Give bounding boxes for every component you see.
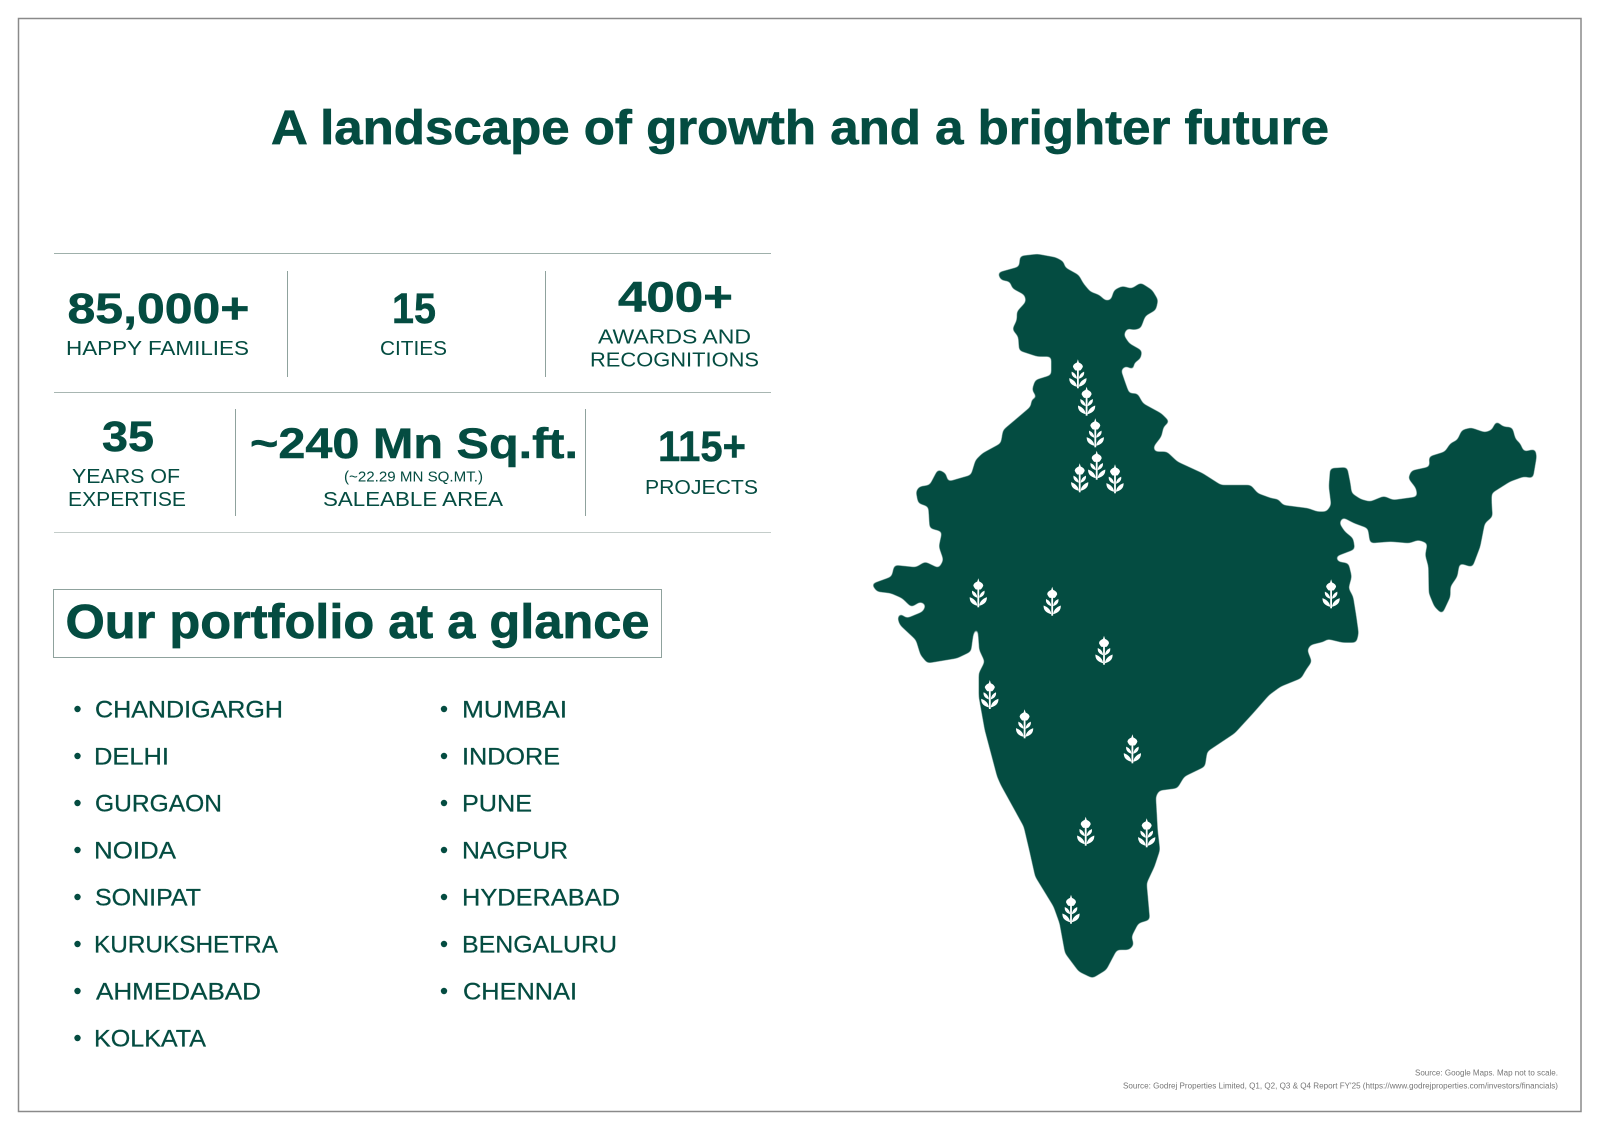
stat: cities [380,285,447,360]
stat: awards: AWARDS AND [598,326,751,348]
stat: years of expertise: EXPERTISE [68,488,186,511]
list: cities column two [441,696,620,1006]
stat: years of expertise: 35 [102,413,154,461]
list: cities column one: NOIDA [94,838,176,864]
list: cities column two: CHENNAI [463,978,577,1006]
list: cities column one: GURGAON [95,790,222,818]
list: cities column two: BENGALURU [462,932,617,958]
list: cities column one: AHMEDABAD [96,978,261,1006]
panel: key statistics [54,254,771,532]
stat: awards: RECOGNITIONS [590,348,759,372]
stat: happy families: 85,000+ [68,285,250,333]
list: cities column one: KOLKATA [94,1026,206,1052]
list: cities column one [74,696,283,1052]
stat: happy families: HAPPY FAMILIES [66,337,249,360]
stat: saleable area: (~22.29 MN SQ.MT.) [344,468,483,486]
stat: projects [645,423,758,499]
title: A landscape of growth and a brighter future [271,102,1329,155]
stat: years of expertise [68,413,186,511]
list: cities column two: MUMBAI [462,696,567,724]
list: cities column one: CHANDIGARGH [95,696,283,724]
heading: our portfolio at a glance: Our portfolio at a glance [66,596,650,649]
footnote: sources: Source: Godrej Properties Limited, Q1, Q2, Q3 & Q4 Report FY'25 (https://www.godrejproperties.com/investors/financials) [1123,1080,1558,1090]
stat: saleable area: ~240 Mn Sq.ft. [250,420,578,468]
stat: projects: 115+ [658,423,746,471]
list: cities column one: DELHI [94,744,169,770]
icons: project location markers [970,359,1340,924]
stat: saleable area [250,420,578,511]
list: cities column one: KURUKSHETRA [94,932,278,958]
stat: happy families [66,285,250,360]
footnote: sources [1123,1068,1558,1090]
list: cities column one: SONIPAT [95,884,201,912]
stat: projects: PROJECTS [645,476,758,499]
map of India [871,254,1537,978]
list: cities column two: HYDERABAD [462,884,620,912]
list: cities column two: INDORE [462,744,560,770]
stat: cities: CITIES [380,337,447,360]
stat: cities: 15 [392,285,436,333]
footnote: sources: Source: Google Maps. Map not to scale. [1415,1068,1558,1078]
stat: awards: 400+ [618,274,733,322]
stat: years of expertise: YEARS OF [72,465,180,488]
stat: saleable area: SALEABLE AREA [323,488,503,511]
stat: awards [590,274,759,372]
list: cities column two: PUNE [462,790,532,818]
list: cities column two: NAGPUR [462,838,568,864]
